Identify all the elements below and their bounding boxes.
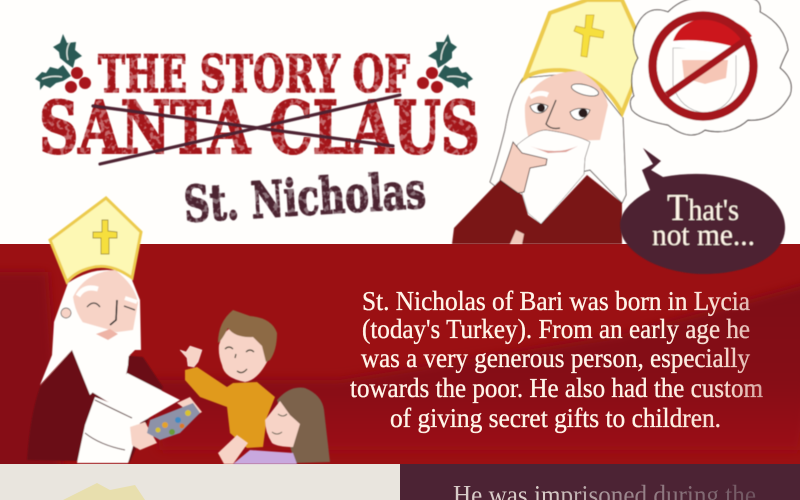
beard [517, 130, 590, 224]
beard [70, 322, 130, 402]
shirt [185, 367, 275, 448]
panel: bottom dark plum strip [400, 464, 800, 500]
title [35, 34, 480, 170]
story text: towards the poor. He also had the custom [350, 373, 763, 403]
illustration: girl [218, 388, 330, 464]
story text: was a very generous person, especially [361, 343, 750, 373]
story text: (today's Turkey). From an early age he [362, 314, 750, 344]
illustration: thoughtful St. Nicholas [452, 0, 646, 244]
face [265, 401, 300, 447]
illustration: St. Nicholas giving gifts [27, 198, 202, 463]
cape [27, 350, 163, 462]
hand [180, 346, 202, 367]
heading: the story of: THE STORY OF [98, 45, 410, 105]
heading: santa claus: SANTA CLAUS [39, 85, 480, 170]
candy bowl [147, 403, 200, 440]
icon: left holly [35, 34, 91, 93]
icon: right holly [417, 34, 473, 93]
hair [218, 310, 277, 362]
hands [218, 435, 248, 464]
mitre [525, 0, 646, 113]
mitre [50, 198, 141, 282]
mitre cross [574, 15, 604, 57]
strike-through cross [93, 95, 400, 164]
mitre cross [93, 220, 117, 254]
story text: St. Nicholas of Bari was born in Lycia [362, 286, 750, 316]
robe [77, 373, 180, 463]
brows and eyes [530, 82, 600, 128]
shirt [233, 450, 297, 464]
icon: Santa hat [673, 17, 752, 48]
robe [452, 175, 622, 244]
story text [350, 286, 763, 433]
panel: red story band [0, 244, 800, 480]
illustration: boy [180, 310, 277, 448]
hand on chin [500, 142, 547, 193]
face [73, 270, 138, 335]
subtitle: St. Nicholas: St. Nicholas [182, 161, 427, 234]
thought bubble [630, 0, 791, 135]
head [219, 325, 269, 382]
illustration: next panel mitre top [63, 483, 145, 500]
icon: Santa beard and face [673, 48, 736, 113]
face [525, 71, 608, 142]
bubble text: That's [667, 187, 739, 229]
hands [130, 422, 157, 450]
story text: of giving secret gifts to children. [390, 403, 721, 433]
hair [40, 270, 141, 395]
hair [490, 72, 626, 203]
speech bubble: not me... [652, 217, 755, 252]
panel: bottom beige strip [0, 464, 400, 500]
hair [277, 388, 330, 463]
no sign [652, 16, 754, 116]
speech bubble [620, 148, 785, 274]
